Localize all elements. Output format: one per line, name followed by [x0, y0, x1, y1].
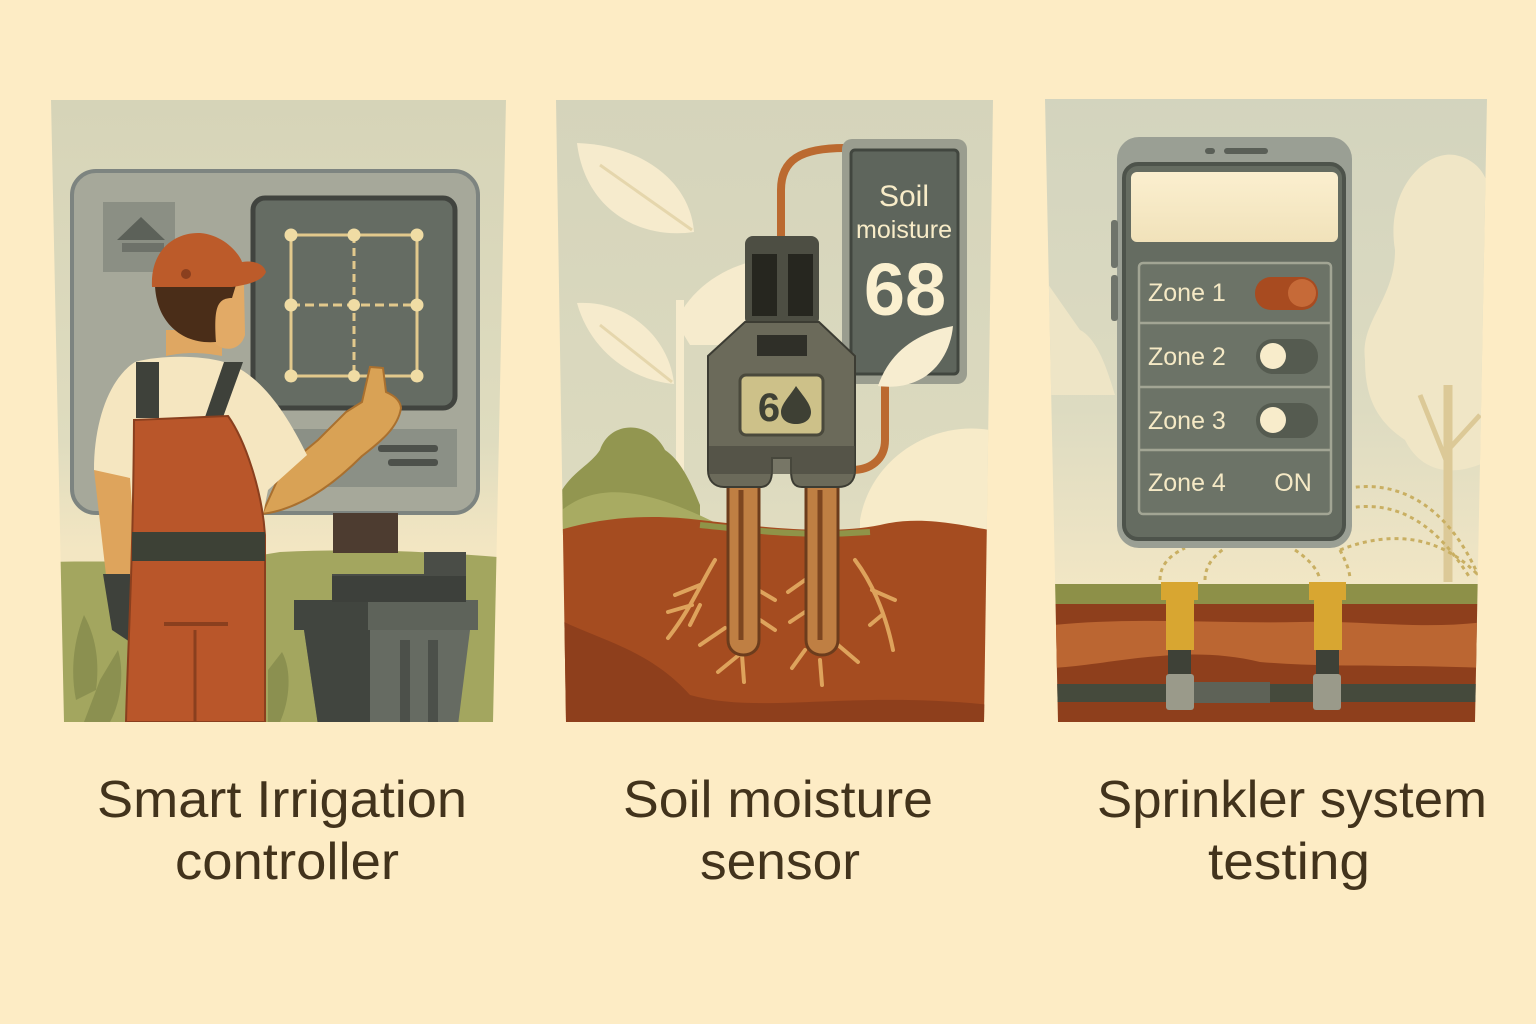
- hair and head: [155, 285, 236, 342]
- sensor display sign: moisture: [856, 216, 952, 244]
- sensor readout: 6: [758, 386, 780, 430]
- smartphone: [1111, 137, 1352, 548]
- zone 2 row: Zone 2: [1148, 343, 1226, 371]
- worker figure: [94, 233, 401, 722]
- controller housing: [72, 171, 478, 513]
- valve box: [294, 552, 478, 725]
- left arm: [94, 470, 132, 575]
- zone 2 row: [1148, 339, 1318, 374]
- icon: small house screen: [103, 202, 175, 272]
- bushes: [562, 428, 700, 540]
- cap: [152, 233, 266, 287]
- zone 1 row: Zone 1: [1148, 279, 1226, 307]
- zone 4 row: Zone 4: [1148, 469, 1226, 497]
- ground: green field: [50, 550, 510, 725]
- zone 4 row: ON: [1274, 469, 1312, 497]
- neck: [166, 330, 222, 356]
- grid diagram: [284, 228, 424, 382]
- suspenders: [136, 362, 159, 418]
- sprinkler heads: [1161, 582, 1346, 710]
- water arcs: [1160, 487, 1478, 580]
- face: [215, 285, 245, 349]
- decorative leaves: [577, 143, 746, 471]
- caption: sprinkler system testing: Sprinkler system: [1097, 771, 1487, 829]
- trees and clouds: [1365, 155, 1490, 470]
- clouds: [860, 428, 988, 530]
- zone 4 row: [1148, 469, 1312, 497]
- soil: [560, 517, 990, 725]
- caption: smart irrigation controller: [97, 771, 467, 891]
- panel: soil moisture sensor: [545, 95, 1005, 725]
- sensor display sign: 68: [864, 248, 946, 331]
- panel: sprinkler system testing: [1035, 95, 1495, 725]
- leaf veins: [600, 165, 692, 382]
- shirt: [94, 357, 307, 520]
- sensor body: [708, 236, 855, 487]
- sensor display sign: [842, 139, 967, 384]
- ground layers: [1045, 584, 1485, 604]
- touchscreen: [253, 198, 455, 408]
- foliage: [73, 615, 289, 722]
- glove: [103, 574, 130, 642]
- caption: smart irrigation controller: Smart Irrigation: [97, 771, 467, 829]
- overalls: [126, 416, 265, 722]
- panel: smart irrigation controller: [40, 95, 520, 725]
- lower control strip: [285, 429, 457, 487]
- zone 1 row: [1148, 277, 1318, 310]
- caption: soil moisture sensor: [623, 771, 933, 891]
- leaf over sign: [878, 326, 953, 387]
- zone list: [1139, 263, 1331, 514]
- caption: soil moisture sensor: sensor: [700, 833, 860, 891]
- caption: sprinkler system testing: [1097, 771, 1487, 891]
- roots: [668, 560, 895, 685]
- caption: smart irrigation controller: controller: [175, 833, 399, 891]
- zone 3 row: Zone 3: [1148, 407, 1226, 435]
- probes: [728, 480, 838, 655]
- sensor display sign: Soil: [879, 180, 929, 213]
- arm pointing: [262, 367, 401, 514]
- controller post: [333, 513, 398, 553]
- caption: soil moisture sensor: Soil moisture: [623, 771, 933, 829]
- caption: sprinkler system testing: testing: [1208, 833, 1370, 891]
- zone 3 row: [1148, 403, 1318, 438]
- copper cable: [781, 148, 845, 240]
- sensor readout: [740, 375, 823, 435]
